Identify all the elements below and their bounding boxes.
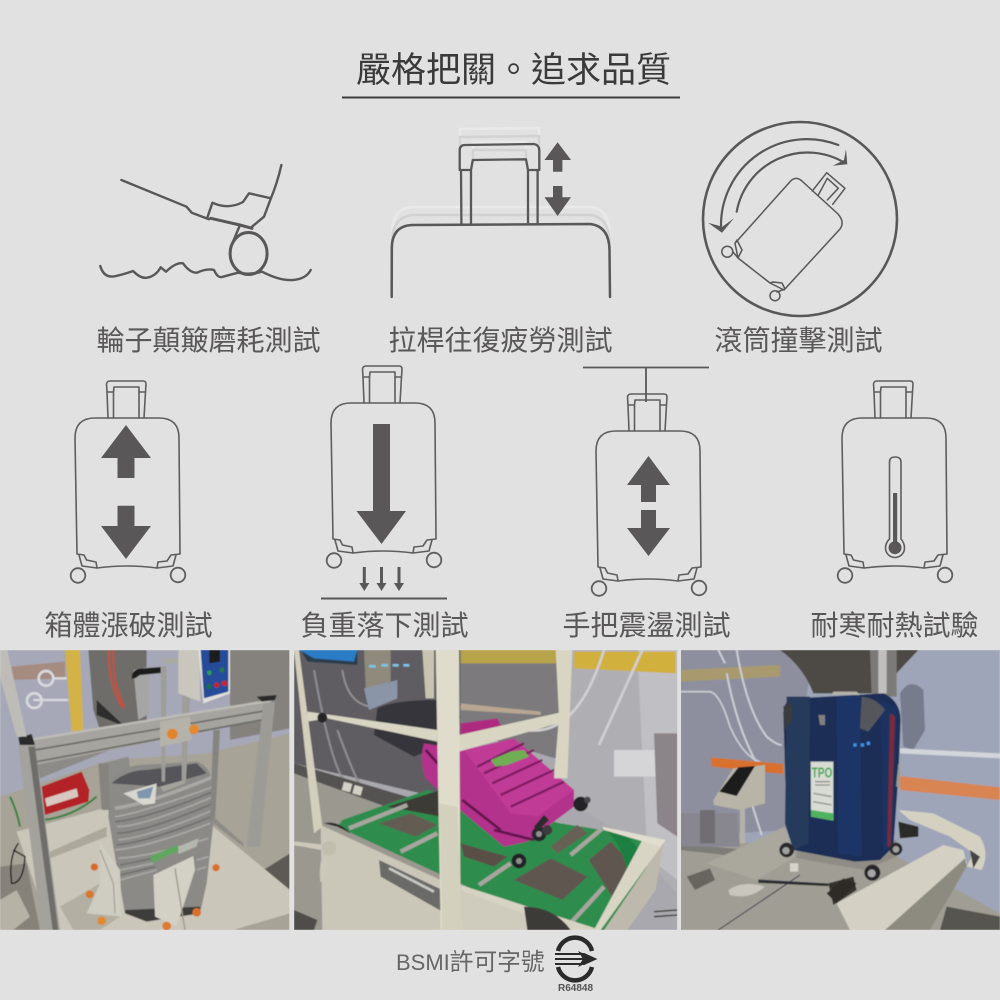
arrows: up and down [101,425,151,559]
suitcase top [392,224,610,297]
icon: case burst test [71,381,185,583]
arrows: small down [359,567,404,591]
icon: tumble drum test [703,122,897,316]
rotation arrows [721,139,845,226]
tumbling suitcase [733,178,842,292]
floor line [321,598,447,600]
text: BSMI permit number: BSMI許可字號 [396,949,545,976]
hanger [583,368,709,402]
label: temperature test: 耐寒耐熱試驗 [810,610,979,641]
icon: drop test [321,366,447,600]
thermometer [886,457,904,558]
icon: BSMI certification mark [555,938,595,994]
label: burst test: 箱體漲破測試 [44,610,213,641]
drum circle [703,122,897,316]
photo: drum test machine with pink suitcase [294,650,677,930]
arrow: up and down [544,142,571,216]
icon: handle shake test [583,368,709,596]
icon: wheel bump wear test [100,165,311,280]
photo: impact test machine with blue suitcase [680,650,1000,930]
icon: cold and heat test [838,381,952,583]
label: drum test: 滾筒撞擊測試 [714,325,883,356]
label: wheel test: 輪子顛簸磨耗測試 [96,325,321,356]
label: drop test: 負重落下測試 [300,610,469,641]
title: 嚴格把關。追求品質 [356,51,671,90]
label: handle test: 拉桿往復疲勞測試 [388,325,613,356]
photo: impact test machine with blue suitcase: TPO [812,765,832,781]
footer: BSMI permit [396,938,595,994]
photo: burst test machine with grey suitcase [0,650,290,930]
arrows: up and down [627,456,670,556]
icon: BSMI certification mark: R64848 [558,983,593,994]
extended handle [460,144,539,224]
icon: handle fatigue test [392,128,610,297]
label: shake test: 手把震盪測試 [562,610,731,641]
arrow: large down [356,424,406,544]
handle ghost positions [392,128,610,280]
